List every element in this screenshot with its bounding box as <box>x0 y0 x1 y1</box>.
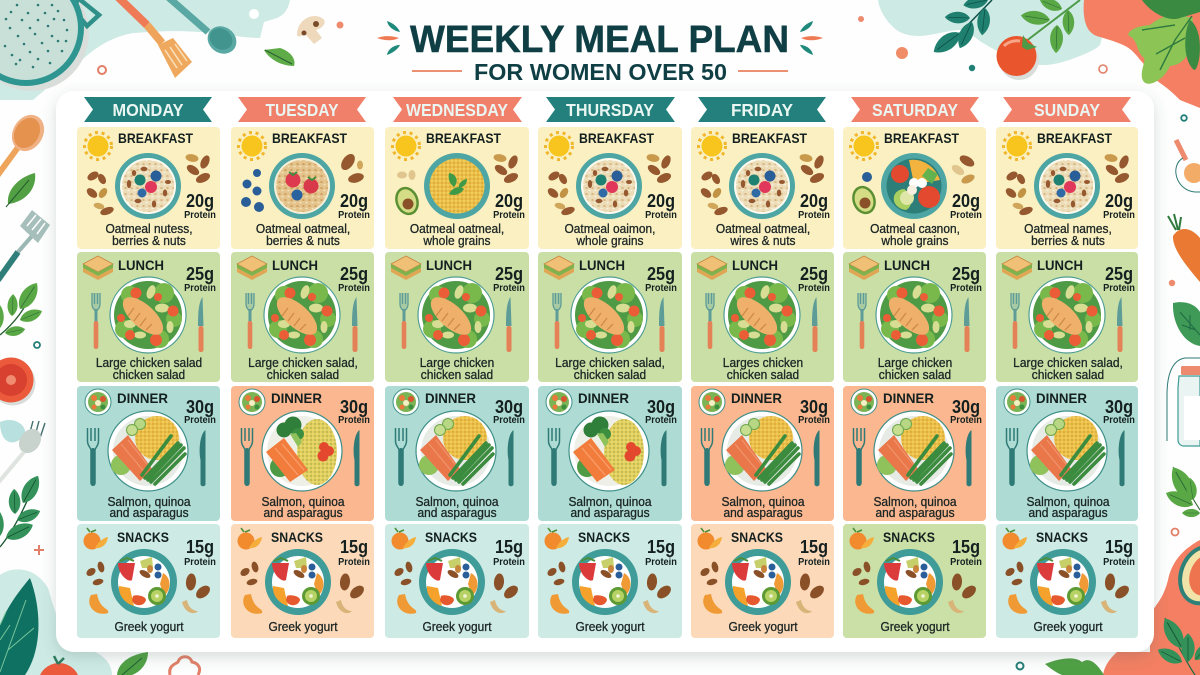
card: Monday dinner: Protein <box>184 415 216 426</box>
card: Wednesday dinner: 30g <box>495 396 523 417</box>
card: Tuesday dinner: DINNER <box>271 390 322 406</box>
card: Friday snacks: Protein <box>798 557 830 568</box>
card: Monday dinner: 30g <box>186 396 214 417</box>
card: Thursday snacks: 15g <box>647 536 675 557</box>
banner: Monday <box>84 97 212 122</box>
card: Wednesday lunch: LUNCH <box>426 257 472 273</box>
card: Sunday dinner: Protein <box>1103 415 1135 426</box>
banner: Friday: FRIDAY <box>731 100 793 120</box>
illustration: top left kitchen tools <box>0 0 344 100</box>
card: Wednesday snacks: Greek yogurt <box>422 620 492 634</box>
card: Friday dinner: Protein <box>798 415 830 426</box>
card: Saturday breakfast: whole grains <box>880 234 949 248</box>
banner: Tuesday <box>238 97 366 122</box>
card: Sunday dinner <box>996 386 1138 521</box>
card: Thursday lunch: Protein <box>645 283 677 294</box>
card: Sunday breakfast: BREAKFAST <box>1037 130 1112 146</box>
card: Friday lunch: Larges chicken <box>723 356 803 370</box>
card: Saturday snacks: Protein <box>950 557 982 568</box>
card: Monday breakfast <box>77 127 220 249</box>
banner: Sunday <box>1003 97 1131 122</box>
card: Sunday snacks: Greek yogurt <box>1033 620 1103 634</box>
card: Sunday breakfast: Oatmeal names, <box>1024 222 1112 236</box>
card: Thursday lunch: chicken salad <box>574 368 646 382</box>
card: Wednesday breakfast: Protein <box>493 210 525 221</box>
card: Wednesday lunch: Protein <box>493 283 525 294</box>
card: Thursday dinner: Salmon, quinoa <box>568 495 652 509</box>
card: Saturday dinner: Protein <box>950 415 982 426</box>
banner: Saturday: SATURDAY <box>872 100 958 120</box>
card: Wednesday dinner: Protein <box>493 415 525 426</box>
banner: Thursday <box>546 97 675 122</box>
card: Tuesday snacks: 15g <box>340 536 368 557</box>
card: Tuesday breakfast: BREAKFAST <box>272 130 347 146</box>
card: Thursday snacks: SNACKS <box>578 529 630 545</box>
card: Saturday lunch: chicken salad <box>879 368 951 382</box>
card: Monday snacks <box>77 524 220 638</box>
card: Sunday lunch <box>996 252 1138 382</box>
card: Thursday snacks <box>538 524 682 638</box>
card: Saturday breakfast: BREAKFAST <box>884 130 959 146</box>
column: Tuesday <box>231 127 374 638</box>
card: Wednesday snacks: SNACKS <box>425 529 477 545</box>
card: Tuesday dinner: 30g <box>340 396 368 417</box>
card: Wednesday lunch: Large chicken <box>420 356 494 370</box>
title heading: WEEKLY MEAL PLAN <box>410 19 789 61</box>
card: Sunday breakfast <box>996 127 1138 249</box>
card: Tuesday dinner <box>231 386 374 521</box>
card: Tuesday breakfast: Protein <box>338 210 370 221</box>
banner: Wednesday: WEDNESDAY <box>406 100 508 120</box>
card: Friday breakfast <box>691 127 834 249</box>
banner: Monday: MONDAY <box>112 100 184 120</box>
card: Friday dinner <box>691 386 834 521</box>
card: Monday lunch: chicken salad <box>113 368 185 382</box>
card: Monday breakfast: Protein <box>184 210 216 221</box>
subtitle: FOR WOMEN OVER 50 <box>474 59 727 85</box>
card: Friday dinner: DINNER <box>731 390 782 406</box>
card: Monday breakfast: Oatmeal nutess, <box>105 222 193 236</box>
card: Thursday lunch <box>538 252 682 382</box>
card: Tuesday snacks <box>231 524 374 638</box>
card: Tuesday lunch: Large chicken salad, <box>248 356 358 370</box>
card: Saturday dinner: and asparagus <box>875 506 955 520</box>
illustration: left margin utensils and herbs <box>0 109 112 675</box>
card: Sunday snacks: Protein <box>1103 557 1135 568</box>
card: Tuesday dinner: and asparagus <box>263 506 343 520</box>
card: Monday dinner: and asparagus <box>109 506 189 520</box>
card: Friday breakfast: Oatmeal oatmeal, <box>716 222 810 236</box>
card: Wednesday breakfast: 20g <box>495 190 523 211</box>
card: Wednesday lunch: 25g <box>495 263 523 284</box>
card: Monday snacks: 15g <box>186 536 214 557</box>
card: Tuesday breakfast <box>231 127 374 249</box>
card: Saturday lunch: Protein <box>950 283 982 294</box>
card: Monday snacks: SNACKS <box>117 529 169 545</box>
card: Thursday lunch: Large chicken salad, <box>555 356 665 370</box>
card: Thursday breakfast <box>538 127 682 249</box>
card: Friday dinner: 30g <box>800 396 828 417</box>
card: Monday snacks: Greek yogurt <box>114 620 184 634</box>
card: Sunday snacks: SNACKS <box>1036 529 1088 545</box>
card: Monday dinner: Salmon, quinoa <box>107 495 191 509</box>
column: Thursday <box>538 127 682 638</box>
column: Sunday <box>996 127 1138 638</box>
card: Friday snacks: SNACKS <box>731 529 783 545</box>
card: Wednesday lunch <box>385 252 529 382</box>
card: Friday lunch: LUNCH <box>732 257 778 273</box>
card: Wednesday lunch: chicken salad <box>421 368 493 382</box>
card: Sunday breakfast: 20g <box>1105 190 1133 211</box>
card: Wednesday dinner: DINNER <box>425 390 476 406</box>
card: Saturday dinner: 30g <box>952 396 980 417</box>
banner: Saturday <box>851 97 979 122</box>
card: Thursday breakfast: Oatmeal oaimon, <box>564 222 656 236</box>
illustration: bottom edge items <box>38 652 1104 675</box>
card: Thursday dinner: and asparagus <box>570 506 650 520</box>
card: Monday lunch: Protein <box>184 283 216 294</box>
card: Thursday breakfast: BREAKFAST <box>579 130 654 146</box>
card: Tuesday breakfast: 20g <box>340 190 368 211</box>
card: Wednesday snacks <box>385 524 529 638</box>
card: Thursday snacks: Protein <box>645 557 677 568</box>
card: Wednesday breakfast <box>385 127 529 249</box>
card: Wednesday dinner: Salmon, quinoa <box>415 495 499 509</box>
card: Friday breakfast: 20g <box>800 190 828 211</box>
card: Wednesday dinner: and asparagus <box>417 506 497 520</box>
card: Wednesday dinner <box>385 386 529 521</box>
card: Friday snacks: 15g <box>800 536 828 557</box>
card: Monday dinner <box>77 386 220 521</box>
card: Sunday lunch: chicken salad <box>1032 368 1104 382</box>
card: Wednesday breakfast: BREAKFAST <box>426 130 501 146</box>
card: Saturday snacks <box>843 524 986 638</box>
card: Sunday dinner: 30g <box>1105 396 1133 417</box>
column: Saturday <box>843 127 986 638</box>
card: Sunday dinner: Salmon, quinoa <box>1026 495 1110 509</box>
card: Friday snacks: Greek yogurt <box>728 620 798 634</box>
card: Saturday snacks: 15g <box>952 536 980 557</box>
card: Sunday breakfast: berries & nuts <box>1031 234 1105 248</box>
column: Monday <box>77 127 220 638</box>
title ornaments <box>377 21 823 71</box>
card: Monday lunch: 25g <box>186 263 214 284</box>
card: Tuesday breakfast: berries & nuts <box>266 234 340 248</box>
card: Sunday lunch: 25g <box>1105 263 1133 284</box>
card: Tuesday lunch <box>231 252 374 382</box>
card: Tuesday snacks: Greek yogurt <box>268 620 338 634</box>
card: Friday dinner: and asparagus <box>723 506 803 520</box>
card: Saturday lunch: 25g <box>952 263 980 284</box>
card: Tuesday snacks: SNACKS <box>271 529 323 545</box>
card: Thursday dinner: DINNER <box>578 390 629 406</box>
card: Saturday snacks: SNACKS <box>883 529 935 545</box>
card: Wednesday breakfast: whole grains <box>422 234 491 248</box>
card: Saturday lunch <box>843 252 986 382</box>
card: Saturday lunch: Large chicken <box>878 356 952 370</box>
card: Thursday snacks: Greek yogurt <box>575 620 645 634</box>
card: Saturday dinner: DINNER <box>883 390 934 406</box>
column: Wednesday <box>385 127 529 638</box>
card: Monday dinner: DINNER <box>117 390 168 406</box>
card: Friday lunch <box>691 252 834 382</box>
card: Thursday lunch: 25g <box>647 263 675 284</box>
card: Thursday dinner: 30g <box>647 396 675 417</box>
card: Saturday lunch: LUNCH <box>884 257 930 273</box>
card: Thursday breakfast: whole grains <box>575 234 644 248</box>
card: Sunday lunch: Protein <box>1103 283 1135 294</box>
card: Monday breakfast: BREAKFAST <box>118 130 193 146</box>
card: Tuesday lunch: LUNCH <box>272 257 318 273</box>
card: Sunday dinner: DINNER <box>1036 390 1087 406</box>
card: Sunday lunch: Large chicken salad, <box>1013 356 1123 370</box>
illustration: right margin vegetables <box>1103 115 1200 675</box>
panel: white meal plan board <box>56 91 1154 652</box>
card: Tuesday lunch: Protein <box>338 283 370 294</box>
card: Sunday snacks <box>996 524 1138 638</box>
card: Wednesday snacks: Protein <box>493 557 525 568</box>
card: Saturday dinner <box>843 386 986 521</box>
card: Friday lunch: 25g <box>800 263 828 284</box>
card: Thursday dinner: Protein <box>645 415 677 426</box>
card: Tuesday lunch: chicken salad <box>267 368 339 382</box>
illustration: top right vegetables <box>858 0 1200 108</box>
card: Friday lunch: chicken salad <box>727 368 799 382</box>
banner: Wednesday <box>393 97 522 122</box>
card: Monday breakfast: berries & nuts <box>112 234 186 248</box>
card: Monday lunch <box>77 252 220 382</box>
card: Friday breakfast: BREAKFAST <box>732 130 807 146</box>
card: Wednesday breakfast: Oatmeal oatmeal, <box>410 222 504 236</box>
card: Thursday lunch: LUNCH <box>579 257 625 273</box>
card: Saturday breakfast <box>843 127 986 249</box>
card: Tuesday breakfast: Oatmeal oatmeal, <box>256 222 350 236</box>
card: Wednesday snacks: 15g <box>495 536 523 557</box>
banner: Tuesday: TUESDAY <box>266 100 339 120</box>
card: Tuesday lunch: 25g <box>340 263 368 284</box>
card: Saturday breakfast: 20g <box>952 190 980 211</box>
card: Friday lunch: Protein <box>798 283 830 294</box>
card: Tuesday dinner: Protein <box>338 415 370 426</box>
card: Thursday breakfast: 20g <box>647 190 675 211</box>
day banners <box>84 97 1131 122</box>
card: Tuesday dinner: Salmon, quinoa <box>261 495 345 509</box>
card: Sunday dinner: and asparagus <box>1028 506 1108 520</box>
banner: Thursday: THURSDAY <box>566 100 654 120</box>
card: Saturday breakfast: Protein <box>950 210 982 221</box>
card: Tuesday snacks: Protein <box>338 557 370 568</box>
card: Thursday dinner <box>538 386 682 521</box>
card: Sunday breakfast: Protein <box>1103 210 1135 221</box>
column: Friday <box>691 127 834 638</box>
card: Monday breakfast: 20g <box>186 190 214 211</box>
card: Sunday lunch: LUNCH <box>1037 257 1083 273</box>
card: Monday lunch: LUNCH <box>118 257 164 273</box>
card: Sunday snacks: 15g <box>1105 536 1133 557</box>
card: Monday lunch: Large chicken salad <box>96 356 202 370</box>
card: Friday dinner: Salmon, quinoa <box>721 495 805 509</box>
card: Saturday snacks: Greek yogurt <box>880 620 950 634</box>
card: Thursday breakfast: Protein <box>645 210 677 221</box>
card: Friday snacks <box>691 524 834 638</box>
banner: Friday <box>698 97 826 122</box>
card: Friday breakfast: wires & nuts <box>729 234 796 248</box>
card: Monday snacks: Protein <box>184 557 216 568</box>
card: Saturday dinner: Salmon, quinoa <box>873 495 957 509</box>
card: Saturday breakfast: Oatmeal caɜnon, <box>870 222 960 236</box>
banner: Sunday: SUNDAY <box>1034 100 1100 120</box>
card: Friday breakfast: Protein <box>798 210 830 221</box>
title <box>377 19 823 85</box>
